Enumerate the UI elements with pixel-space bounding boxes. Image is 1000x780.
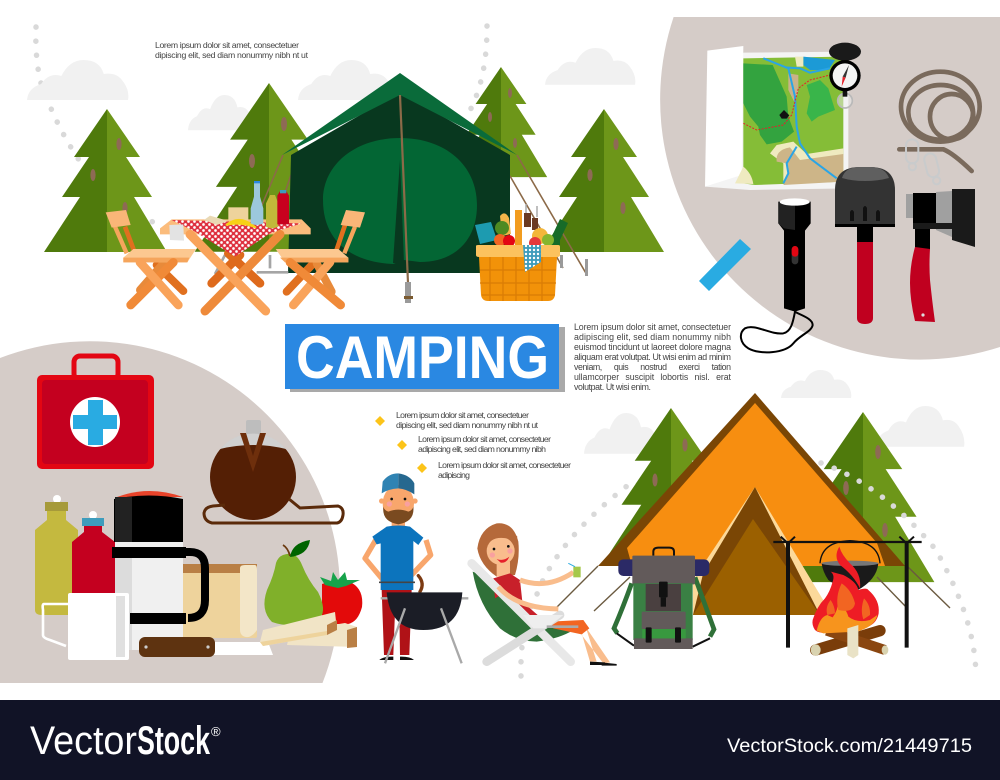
text block: top caption: [155, 40, 309, 60]
leather canteen: [204, 420, 343, 523]
neck and face: [486, 528, 517, 577]
yellow bottle: [35, 495, 78, 615]
background panel: upper right grey circle: [660, 17, 1000, 360]
footer bar: VectorStock.com/21449715: [727, 736, 972, 757]
first aid kit: [37, 356, 154, 469]
rope coil: [899, 72, 980, 171]
bullet 3: adipiscing: [438, 470, 470, 480]
napkin: [169, 224, 184, 241]
pine trees: lower scene: [602, 408, 934, 582]
hair: [477, 523, 519, 577]
tomato: [320, 572, 362, 624]
orange tent: [557, 393, 950, 615]
red bottle: [72, 511, 115, 600]
axe: [906, 189, 975, 322]
clouds: lower scene: [584, 370, 964, 454]
clouds: upper scene: [27, 48, 635, 130]
text block: main paragraph: adipiscing elit, sed diam nonummy nibh: [574, 332, 731, 342]
tablecloth: [172, 220, 302, 257]
pot: [820, 541, 880, 591]
pine trees: upper scene: [44, 67, 664, 252]
folding chair left: [106, 210, 196, 305]
dotted trail: lower arcs: [521, 463, 976, 676]
footer bar: ®: [211, 724, 221, 739]
text block: top caption: dipiscing elit, sed diam nonummy nibh nt ut: [155, 50, 309, 60]
sling seat: [473, 572, 578, 642]
centre log: [847, 625, 858, 658]
bullet 2: [397, 434, 551, 454]
title banner: CAMPING: [296, 324, 549, 391]
text block: main paragraph: euismod tincidunt ut laoreet dolore magna: [574, 342, 731, 352]
flames: [812, 547, 879, 633]
text block: top caption: Lorem ipsum dolor sit amet, consectetuer: [155, 40, 299, 50]
bullet 2: adipiscing elit, sed diam nonummy nibh: [418, 444, 546, 454]
tripod: [773, 537, 922, 648]
picnic basket: [475, 204, 568, 301]
folding map: [705, 46, 848, 190]
tongs and sausage: [379, 580, 415, 585]
arms and cup: [520, 572, 573, 584]
text block: main paragraph: ullamcorper suscipit lobortis nisl. erat: [574, 372, 732, 382]
ruler / pen: [699, 239, 751, 291]
bullet 1: dipiscing elit, sed diam nonummy nibh nt ut: [396, 420, 539, 430]
man grilling: [365, 473, 431, 660]
backpack: [614, 548, 714, 649]
food and bottles: [204, 181, 289, 228]
footer bar: Stock: [137, 719, 210, 763]
shovel: [835, 167, 895, 324]
paper sheet: [213, 642, 273, 655]
bullet 3: [417, 460, 571, 480]
dotted trail: upper centre: [466, 26, 487, 118]
carabiners: [906, 139, 940, 184]
text block: main paragraph: aliquam erat volutpat. Ut wisi enim ad minim: [574, 352, 731, 362]
front legs: [190, 234, 280, 311]
campfire with pot: [773, 537, 922, 658]
red top: [493, 573, 543, 622]
logs: [811, 631, 888, 656]
bullet 1: [375, 410, 539, 430]
text block: main paragraph: veniam, quis nostrud exerci tation: [574, 362, 731, 372]
picnic table: [160, 181, 311, 311]
map terrain: [743, 57, 843, 185]
chair frame: [472, 563, 571, 662]
bullet 3: Lorem ipsum dolor sit amet, consectetuer: [438, 460, 571, 470]
bullet 1: Lorem ipsum dolor sit amet, consectetuer: [396, 410, 529, 420]
bullet 2: Lorem ipsum dolor sit amet, consectetuer: [418, 434, 551, 444]
legs and trousers: [582, 628, 610, 663]
thermos: [112, 491, 205, 650]
text block: main paragraph: volutpat. Ut wisi enim.: [574, 382, 651, 392]
mug: [43, 593, 129, 660]
folding chair right: [276, 210, 365, 305]
green tent: [262, 73, 588, 303]
dotted trail: upper left: [36, 27, 153, 222]
text block: main paragraph: Lorem ipsum dolor sit amet, consectetuer: [574, 322, 731, 332]
head: [379, 473, 418, 524]
flashlight: [741, 198, 813, 352]
shirt: [372, 525, 423, 590]
legs: [382, 590, 412, 655]
pear: [264, 540, 323, 625]
footer bar: Vector: [30, 719, 137, 763]
bullet list: [375, 410, 571, 480]
lanyard: [741, 312, 813, 352]
footer bar: [0, 700, 1000, 780]
pocket knife: [139, 637, 215, 657]
arms: [365, 540, 431, 582]
barbecue grill: [381, 592, 468, 663]
background panel: lower left grey circle: [0, 341, 340, 683]
compass: [829, 43, 861, 108]
bread slices: [260, 612, 357, 648]
bread loaf: [183, 564, 257, 638]
woman in deck chair: [472, 523, 617, 666]
text block: main paragraph: [574, 322, 732, 392]
